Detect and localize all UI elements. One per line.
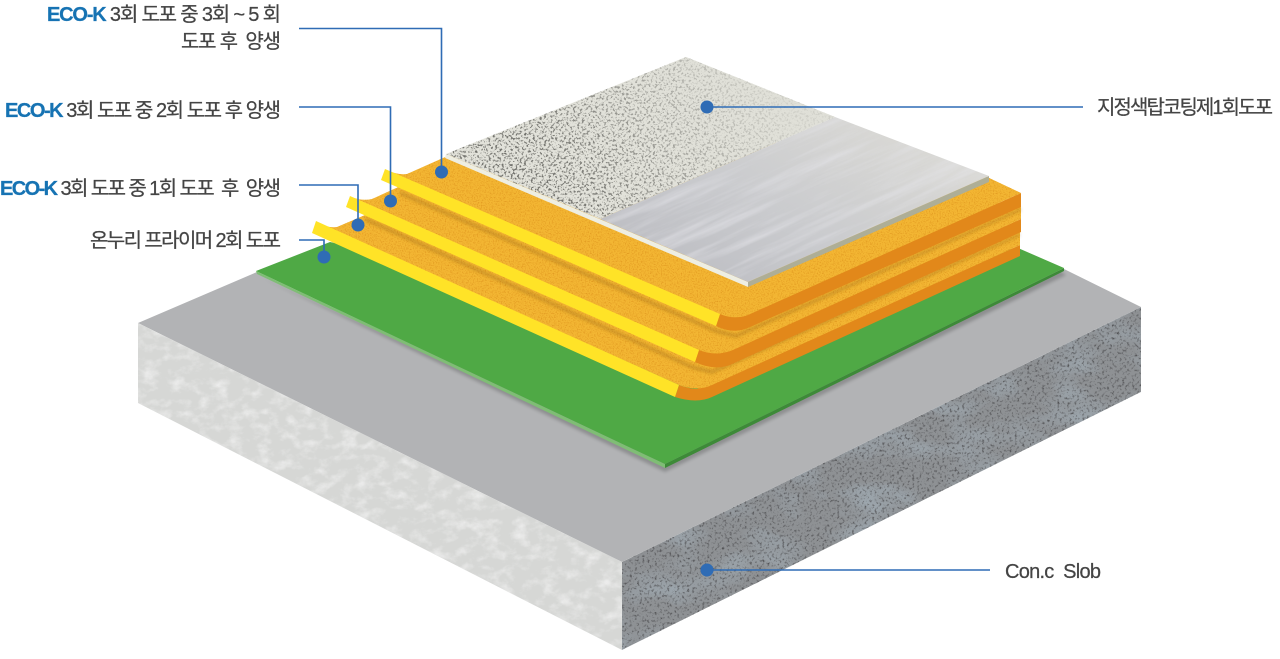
primer top surface <box>256 242 1064 464</box>
leader line <box>299 185 358 225</box>
leader line <box>299 240 324 257</box>
callout: ECO-K third coat <box>47 3 448 178</box>
top coat sample panel <box>445 57 989 287</box>
label: ECO-K 3회 도포 중 2회 도포 후 양생 <box>5 99 281 122</box>
speckle fade toward the back <box>446 57 835 219</box>
leader line <box>707 569 990 571</box>
label: Con.c Slob <box>1005 561 1101 583</box>
primer left edge <box>256 271 665 468</box>
speckled finish <box>446 57 835 219</box>
leader line <box>707 106 1083 108</box>
smooth pearl finish <box>600 117 989 282</box>
yellow strip <box>381 169 720 326</box>
gold surface <box>389 130 1021 317</box>
marker <box>700 100 714 114</box>
concrete slab <box>138 269 1141 650</box>
callout: concrete slab <box>700 561 1101 583</box>
marker <box>700 564 714 576</box>
gold surface <box>354 150 1021 354</box>
panel front-right edge <box>748 176 989 287</box>
callout: ECO-K third coat: 도포 후 양생 <box>181 30 281 53</box>
orange side <box>716 193 1021 331</box>
leader line <box>299 107 390 201</box>
green primer layer <box>256 242 1066 472</box>
yellow strip <box>312 221 679 397</box>
callout: primer <box>90 229 330 264</box>
orange side <box>695 219 1021 367</box>
label: 지정색탑코팅제1회도포 <box>1097 96 1273 119</box>
slab top surface <box>138 269 1141 562</box>
top coating layer <box>381 130 1021 338</box>
callout: top coat <box>700 96 1273 119</box>
marker <box>384 194 397 208</box>
marker <box>435 166 448 178</box>
primer right edge <box>665 268 1064 468</box>
panel front-left edge <box>445 154 748 287</box>
marker <box>318 250 330 264</box>
callout: ECO-K first coat <box>0 177 364 232</box>
bottom coating layer <box>312 170 1020 400</box>
leader line <box>299 28 442 172</box>
slab left face <box>138 323 622 650</box>
label: ECO-K 3회 도포 중 3회 ~ 5 회 <box>47 3 281 26</box>
middle coating layer <box>346 150 1021 374</box>
callout: ECO-K second coat <box>5 99 397 208</box>
gold surface <box>320 170 1020 388</box>
orange side <box>675 245 1020 400</box>
slab right face <box>622 307 1141 650</box>
label: 온누리 프라이머 2회 도포 <box>90 229 281 252</box>
yellow strip <box>346 196 699 362</box>
label: ECO-K 3회 도포 중 1회 도포 후 양생 <box>0 177 281 200</box>
marker <box>352 218 364 232</box>
